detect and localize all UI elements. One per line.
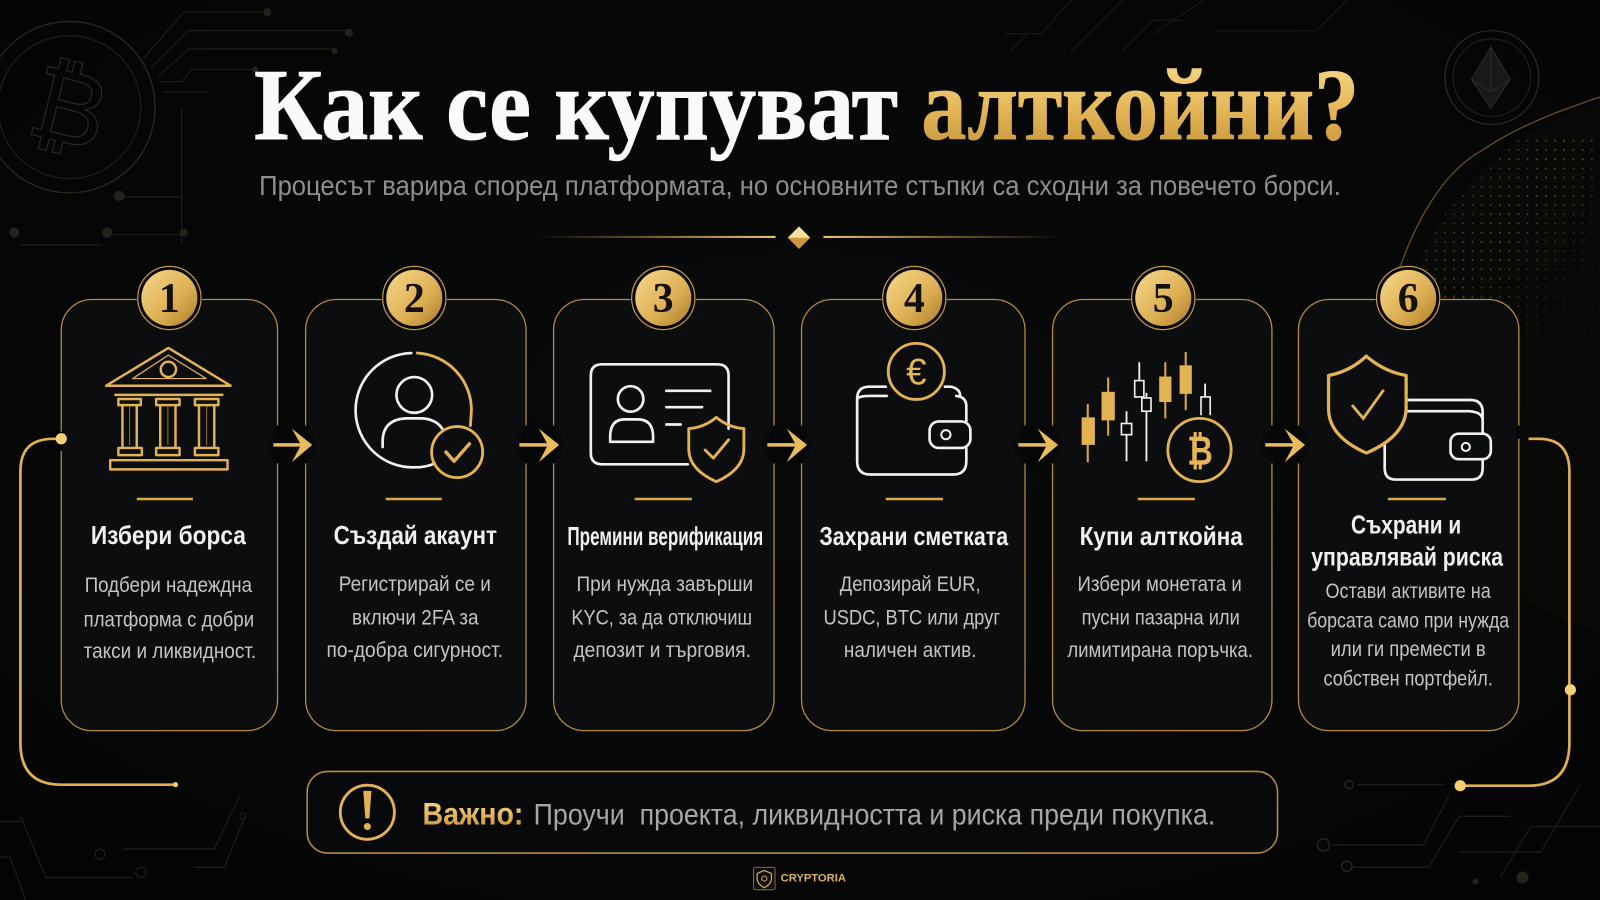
- icon: warning: [340, 785, 394, 839]
- decorative bitcoin coin: [0, 8, 353, 245]
- badge 3: 3: [653, 276, 674, 322]
- loop connector right: [1455, 426, 1576, 791]
- step text: [327, 573, 503, 662]
- separator: [635, 498, 692, 500]
- panel: step 3: [554, 265, 774, 731]
- step text: Депозирай EUR,: [840, 573, 981, 596]
- separator: [137, 498, 193, 500]
- decorative ethereum coin: [1445, 31, 1539, 124]
- step text: USDC, BTC или друг: [823, 606, 1000, 629]
- icon: bank: [106, 348, 231, 469]
- arrow 4 to 5: [1011, 420, 1064, 469]
- step text: [84, 574, 256, 663]
- step text: [1307, 580, 1509, 691]
- step text: [571, 573, 753, 662]
- icon: ID with shield: [591, 364, 744, 482]
- step text: лимитирана поръчка.: [1067, 639, 1253, 662]
- step text: платформа с добри: [84, 609, 254, 632]
- step text: При нужда завърши: [577, 573, 753, 596]
- icon: user account: [356, 353, 483, 478]
- step heading: [1311, 512, 1504, 571]
- panel: step 6: [1298, 265, 1519, 731]
- panel: step 1: [61, 265, 278, 731]
- decorative globe: [1400, 96, 1600, 436]
- panel: step 4: [802, 265, 1025, 731]
- step text: [1067, 573, 1253, 662]
- callout: important: [307, 771, 1278, 853]
- subtitle: Процесът варира според платформата, но основните стъпки са сходни за повечето борси.: [259, 170, 1341, 201]
- separator: [1138, 498, 1195, 500]
- panel: step 5: [1053, 265, 1272, 731]
- panel: step 2: [306, 265, 526, 731]
- arrow 3 to 4: [760, 420, 813, 469]
- step text: Остави активите на: [1326, 580, 1491, 603]
- callout label: Важно:: [422, 795, 523, 831]
- step heading: Избери борса: [91, 522, 247, 550]
- decorative top circuit: [1005, 0, 1347, 51]
- logo: [754, 867, 846, 890]
- step text: по-добра сигурност.: [327, 639, 503, 662]
- badge 4: 4: [904, 276, 925, 322]
- separator: [386, 498, 442, 500]
- badge 5: 5: [1153, 276, 1174, 322]
- icon: candlesticks with bitcoin: [1082, 352, 1231, 482]
- title: Как се купуват: [254, 49, 898, 162]
- step text: собствен портфейл.: [1323, 668, 1493, 691]
- step text: депозит и търговия.: [573, 639, 751, 662]
- step text: пусни пазарна или: [1082, 606, 1240, 629]
- step heading: управлявай риска: [1311, 543, 1504, 571]
- decorative bitcoin coin: ₿: [18, 41, 120, 175]
- badge 6: [1376, 265, 1441, 331]
- title accent: алткойни?: [921, 49, 1359, 162]
- arrow 1 to 2: [265, 420, 318, 469]
- badge 4: [882, 265, 947, 331]
- step heading: Съхрани и: [1351, 512, 1461, 540]
- decorative bottom circuits: [0, 781, 1600, 900]
- icon: candlesticks with bitcoin: ₿: [1187, 426, 1213, 474]
- icon: wallet with euro coin: [857, 343, 970, 474]
- badge 5: [1131, 265, 1196, 331]
- loop connector left: [20, 432, 178, 787]
- logo: CRYPTORIA: [781, 873, 846, 885]
- step text: Избери монетата и: [1078, 573, 1242, 596]
- badge 6: 6: [1398, 276, 1419, 322]
- arrow 5 to 6: [1258, 420, 1311, 469]
- badge 1: [137, 265, 202, 331]
- arrow 2 to 3: [512, 420, 565, 469]
- step heading: Захрани сметката: [819, 523, 1009, 551]
- badge 2: 2: [404, 276, 425, 322]
- step heading: Създай акаунт: [334, 522, 497, 550]
- step text: или ги премести в: [1331, 638, 1486, 661]
- separator: [886, 498, 943, 500]
- separator: [1388, 498, 1446, 500]
- step text: KYC, за да отключиш: [571, 606, 752, 629]
- callout text: Проучи проекта, ликвидността и риска преди покупка.: [534, 798, 1215, 831]
- step heading: Купи алткойна: [1080, 523, 1244, 551]
- icon: wallet with euro coin: €: [906, 352, 927, 393]
- step text: Регистрирай се и: [339, 573, 491, 596]
- step heading: Премини верификация: [567, 523, 763, 551]
- badge 2: [382, 265, 447, 331]
- step text: [823, 573, 1000, 662]
- badge 1: 1: [159, 276, 180, 322]
- step text: наличен актив.: [844, 639, 977, 662]
- step text: включи 2FA за: [352, 606, 479, 629]
- divider: [536, 227, 1062, 249]
- icon: shield and wallet: [1329, 356, 1491, 480]
- step text: такси и ликвидност.: [84, 640, 256, 663]
- step text: Подбери надеждна: [85, 574, 252, 597]
- step text: борсата само при нужда: [1307, 610, 1509, 633]
- badge 3: [631, 265, 696, 331]
